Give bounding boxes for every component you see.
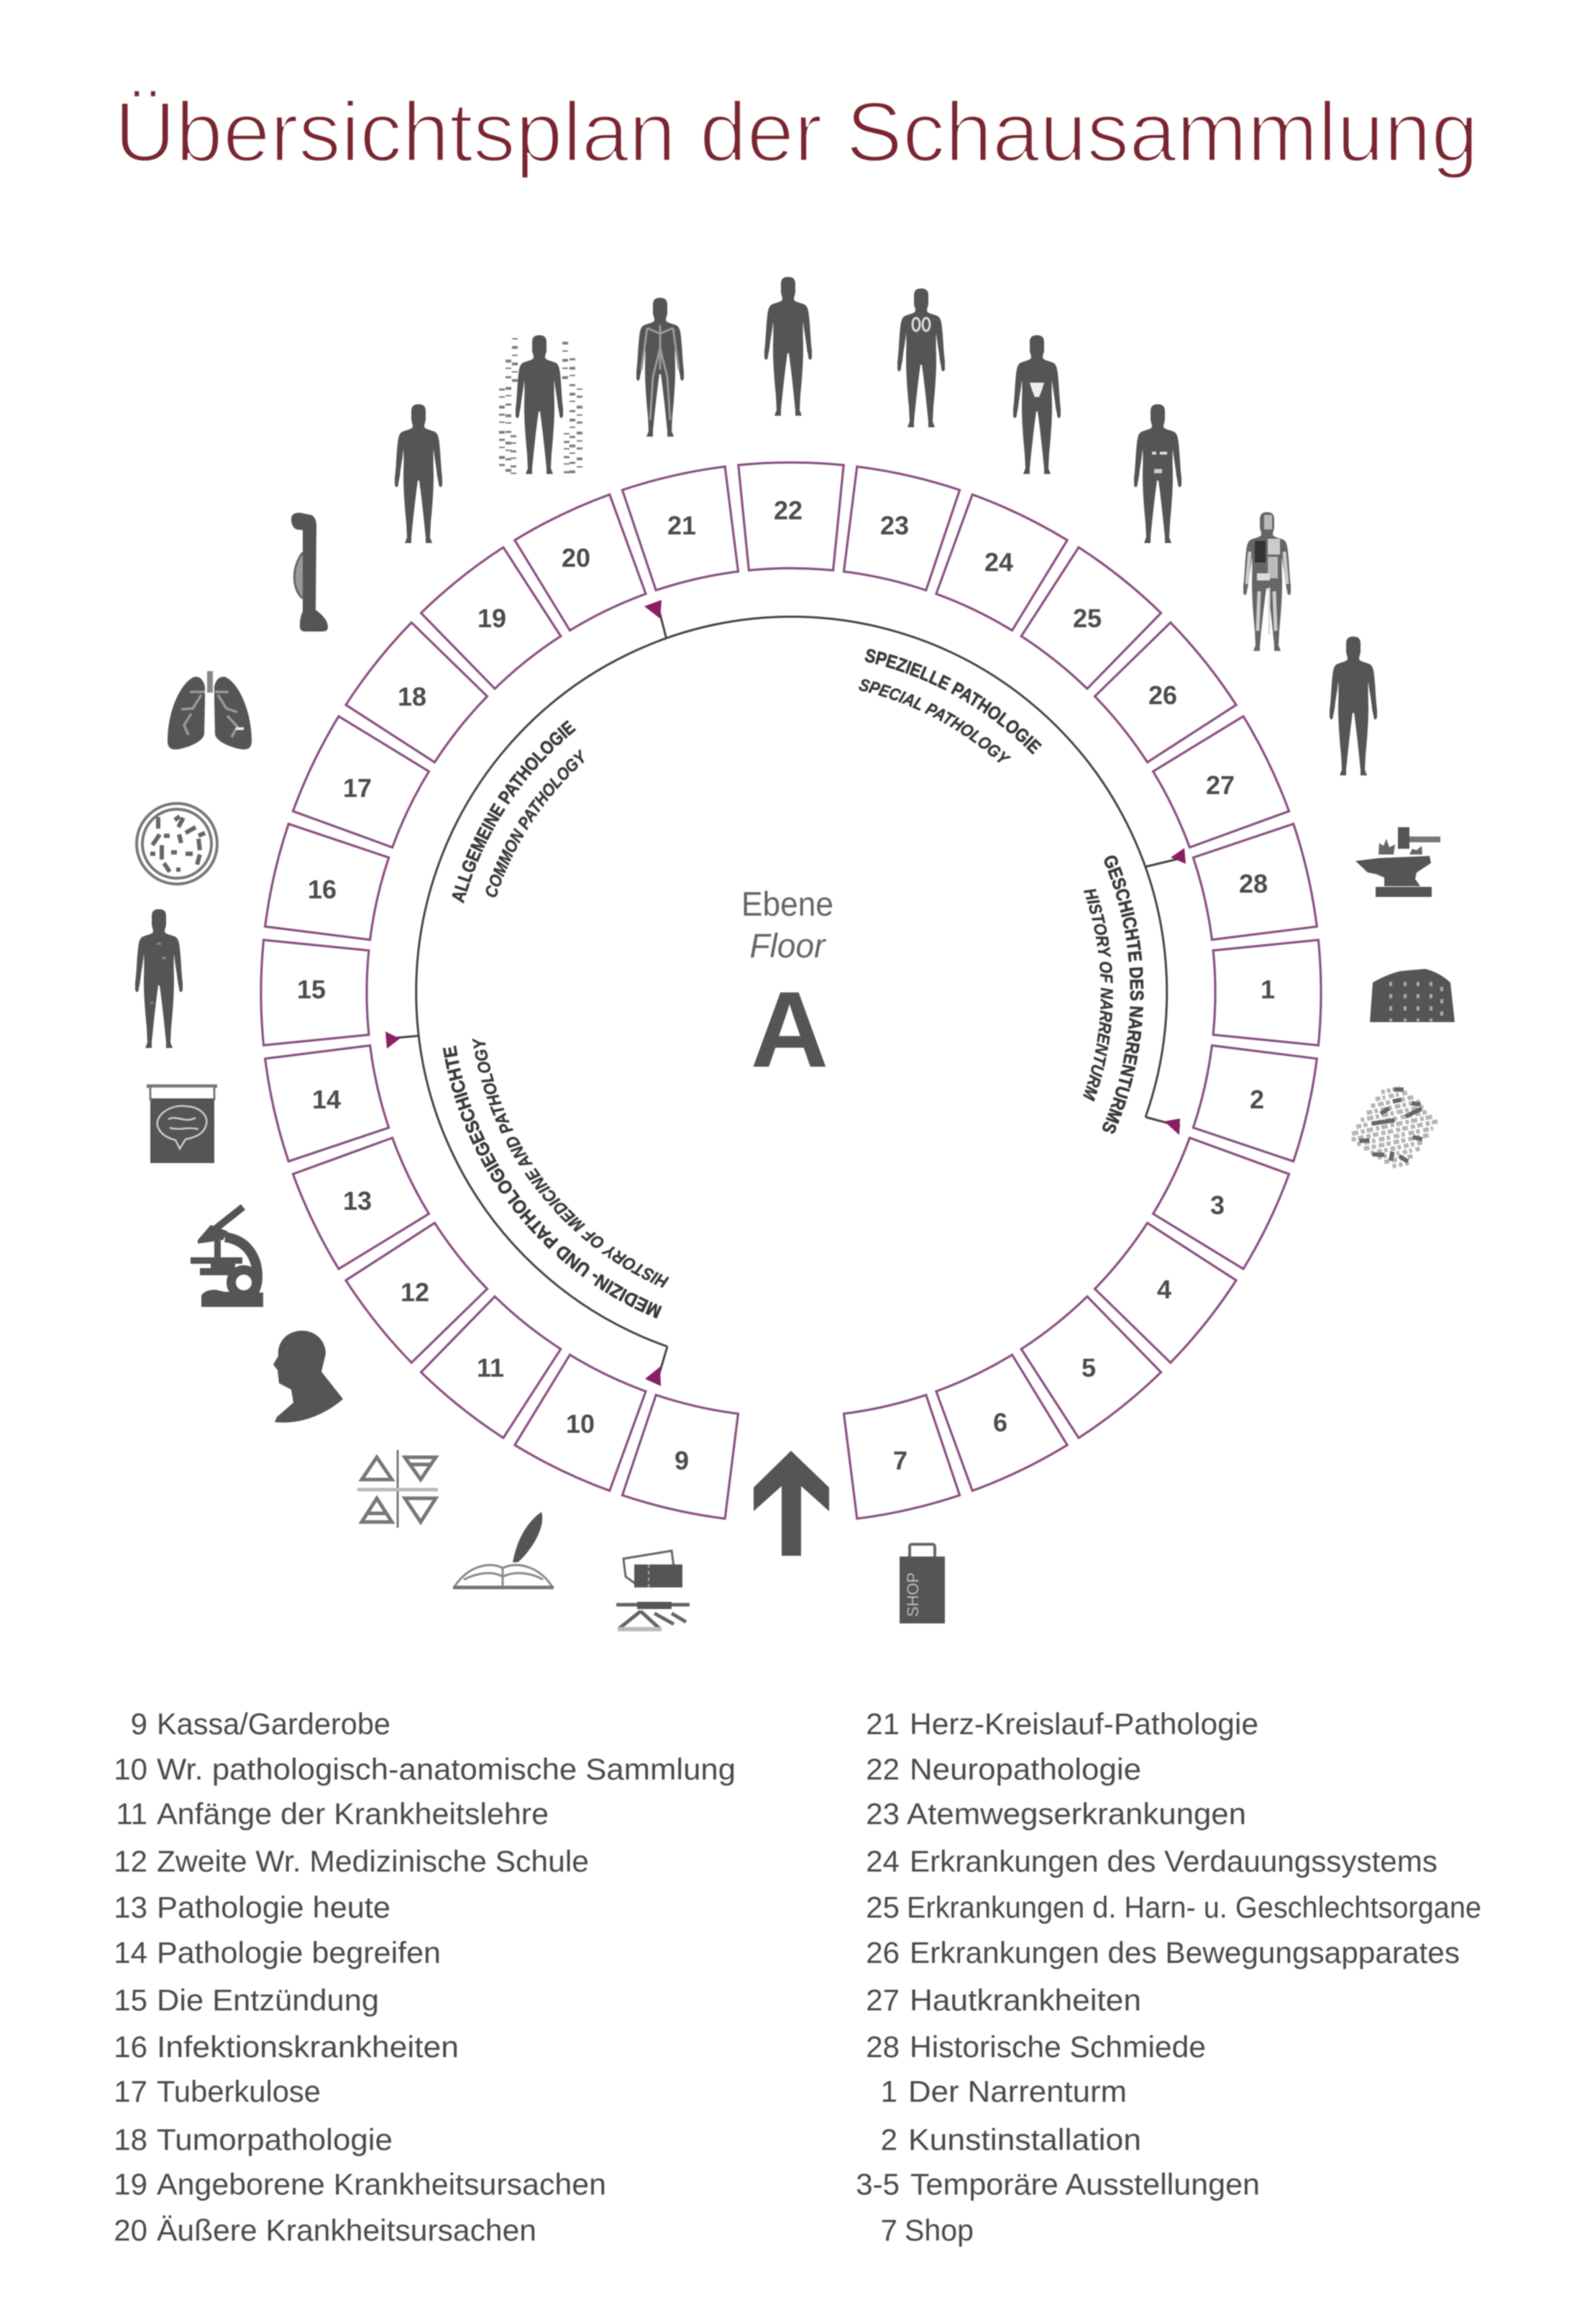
room 18 xyxy=(344,621,494,770)
panel: ring of numbered rooms xyxy=(261,462,1321,1521)
legend item 13: Pathologie heute xyxy=(157,1890,390,1924)
legend item 11: 11 xyxy=(116,1797,147,1831)
icon: anvil room 28 xyxy=(1355,827,1440,897)
legend item 17: Tuberkulose xyxy=(157,2074,321,2108)
legend item 25: Erkrankungen d. Harn- u. Geschlechtsorgane xyxy=(907,1890,1481,1924)
room 15 xyxy=(261,940,369,1045)
legend item 23: Atemwegserkrankungen xyxy=(907,1797,1246,1831)
room 22 xyxy=(739,462,843,570)
room 3 xyxy=(1148,1129,1291,1270)
legend item 13: 13 xyxy=(114,1890,147,1924)
legend item 3-5: 3-5 xyxy=(856,2167,900,2201)
icon: figure with particles room 20 xyxy=(502,335,580,475)
room 4 xyxy=(1088,1215,1238,1364)
room 10 xyxy=(513,1350,655,1493)
room 26: 26 xyxy=(1148,680,1177,710)
room 20 xyxy=(513,492,655,635)
icon: coat and hanger room 9 xyxy=(616,1551,690,1631)
room 2: 2 xyxy=(1250,1085,1264,1114)
icon: shop bag room 7: SHOP xyxy=(904,1572,922,1617)
room 11: 11 xyxy=(477,1353,504,1382)
section label: Spezielle Pathologie: SPEZIELLE PATHOLOGIE xyxy=(864,648,1043,755)
title: Übersichtsplan der Schausammlung xyxy=(114,85,1478,180)
legend item 24: Erkrankungen des Verdauungssystems xyxy=(910,1844,1437,1878)
icon: figure with circulatory system room 21 xyxy=(636,298,684,437)
room 26 xyxy=(1088,621,1238,770)
icon: figure room 19 xyxy=(395,404,442,543)
room 27 xyxy=(1148,715,1291,857)
room 14 xyxy=(262,1035,391,1162)
legend item 20: 20 xyxy=(114,2213,147,2247)
room 14: 14 xyxy=(312,1085,341,1114)
icon: lungs room 17 xyxy=(168,671,252,749)
room 25 xyxy=(1013,545,1163,696)
room 5: 5 xyxy=(1082,1353,1096,1382)
room 23: 23 xyxy=(880,511,909,540)
legend item 12: 12 xyxy=(114,1844,147,1878)
legend item 22: Neuropathologie xyxy=(910,1752,1141,1786)
icon: Narrenturm building room 1 xyxy=(1370,969,1455,1022)
icon: figure with brain room 22 xyxy=(764,277,812,416)
room 7 xyxy=(833,1393,960,1521)
legend item 17: 17 xyxy=(114,2074,147,2108)
room 21 xyxy=(622,464,749,593)
room 9 xyxy=(622,1393,749,1521)
legend item 21: 21 xyxy=(866,1707,900,1741)
inner section circle with section markers xyxy=(385,600,1186,1386)
room 28: 28 xyxy=(1239,869,1268,898)
section label: Medizin- und Pathologiegeschichte: MEDIZIN- UND PATHOLOGIEGESCHICHTE xyxy=(442,1044,663,1319)
icon: figure with urogenital organs room 25 xyxy=(1134,404,1181,543)
legend item 12: Zweite Wr. Medizinische Schule xyxy=(157,1844,589,1878)
legend item 24: 24 xyxy=(866,1844,900,1878)
room 25: 25 xyxy=(1073,603,1102,633)
legend item 2: Kunstinstallation xyxy=(908,2123,1141,2156)
room 16: 16 xyxy=(308,875,337,904)
room 12: 12 xyxy=(401,1277,429,1307)
legend item 28: Historische Schmiede xyxy=(910,2030,1206,2064)
icon: figure with lungs room 23 xyxy=(897,288,945,427)
legend left column xyxy=(114,1707,736,2247)
room 5 xyxy=(1013,1290,1163,1440)
icon: petri dish room 16 xyxy=(137,803,217,884)
room 24: 24 xyxy=(984,547,1013,577)
legend right column xyxy=(856,1707,1481,2247)
room 13 xyxy=(291,1129,434,1270)
section label: Geschichte des Narrenturms: GESCHICHTE DES NARRENTURMS xyxy=(1102,855,1145,1135)
room 22: 22 xyxy=(774,496,803,525)
room 1: 1 xyxy=(1261,975,1275,1004)
section label: Allgemeine Pathologie: COMMON PATHOLOGY xyxy=(485,748,585,898)
icon: brain in jar room 14 xyxy=(147,1086,217,1163)
centre floor label: Floor xyxy=(749,926,827,965)
legend item 20: Äußere Krankheitsursachen xyxy=(157,2213,536,2247)
legend item 25: 25 xyxy=(866,1890,900,1924)
icon: microscope room 13 xyxy=(191,1207,263,1307)
icon: four element symbols room 11 xyxy=(357,1450,438,1528)
room 28 xyxy=(1191,824,1320,950)
legend item 16: Infektionskrankheiten xyxy=(157,2030,459,2064)
room 18: 18 xyxy=(398,682,426,711)
legend item 14: Pathologie begreifen xyxy=(157,1936,441,1969)
legend item 11: Anfänge der Krankheitslehre xyxy=(157,1797,549,1831)
room 12 xyxy=(344,1215,494,1364)
icon: figure room 15 xyxy=(135,909,183,1048)
legend item 14: 14 xyxy=(114,1936,147,1969)
room 2 xyxy=(1191,1035,1320,1162)
legend item 16: 16 xyxy=(114,2030,147,2064)
room 6 xyxy=(927,1350,1069,1493)
legend item 9: Kassa/Garderobe xyxy=(157,1707,390,1741)
room 1 xyxy=(1213,940,1321,1045)
room 19 xyxy=(419,545,569,696)
legend item 1: 1 xyxy=(881,2074,897,2108)
room 3: 3 xyxy=(1210,1190,1225,1220)
room 24 xyxy=(927,492,1069,635)
icon: bust silhouette room 12 xyxy=(273,1331,343,1423)
legend item 7: Shop xyxy=(905,2213,974,2247)
room 17: 17 xyxy=(343,773,372,803)
legend item 19: Angeborene Krankheitsursachen xyxy=(157,2167,606,2201)
room 15: 15 xyxy=(297,975,326,1004)
icon: bone room 18 xyxy=(291,513,328,632)
legend item 10: Wr. pathologisch-anatomische Sammlung xyxy=(157,1752,736,1786)
room 6: 6 xyxy=(993,1408,1007,1437)
legend item 23: 23 xyxy=(866,1797,900,1831)
room 13: 13 xyxy=(343,1186,372,1216)
legend item 10: 10 xyxy=(114,1752,147,1786)
legend item 27: 27 xyxy=(866,1983,900,2017)
entrance arrow xyxy=(754,1451,829,1556)
room 19: 19 xyxy=(477,603,506,633)
room 16 xyxy=(262,824,391,950)
room 23 xyxy=(833,464,960,593)
room 10: 10 xyxy=(566,1409,595,1439)
legend item 1: Der Narrenturm xyxy=(908,2074,1127,2108)
centre floor label: A xyxy=(751,969,828,1090)
centre floor label: Ebene xyxy=(741,885,833,923)
legend item 27: Hautkrankheiten xyxy=(910,1983,1141,2017)
legend item 15: 15 xyxy=(114,1983,147,2017)
room 21: 21 xyxy=(667,511,696,540)
legend item 7: 7 xyxy=(881,2213,897,2247)
legend item 2: 2 xyxy=(881,2123,897,2156)
section label: Medizin- und Pathologiegeschichte: HISTORY OF MEDICINE AND PATHOLOGY xyxy=(472,1037,670,1289)
room 17 xyxy=(291,715,434,857)
room 11 xyxy=(419,1290,569,1440)
icon: figure with digestive system room 24 xyxy=(1013,335,1061,474)
legend item 15: Die Entzündung xyxy=(157,1983,379,2017)
room 27: 27 xyxy=(1206,770,1235,800)
icon: shop bag room 7 xyxy=(900,1544,945,1623)
icon: figure skin room 27 xyxy=(1330,637,1377,775)
centre floor label xyxy=(741,885,833,1090)
legend item 18: Tumorpathologie xyxy=(157,2123,393,2156)
legend item 9: 9 xyxy=(131,1707,147,1741)
room 4: 4 xyxy=(1157,1275,1171,1304)
room 9: 9 xyxy=(675,1446,689,1475)
icon: book and quill room 10 xyxy=(453,1512,554,1588)
section label: Geschichte des Narrenturms: HISTORY OF NARRENTURM xyxy=(1083,888,1114,1102)
legend item 28: 28 xyxy=(866,2030,900,2064)
section label: Spezielle Pathologie: SPECIAL PATHOLOGY xyxy=(858,678,1012,764)
icon: anatomical figure room 26 xyxy=(1243,512,1291,651)
section label: Allgemeine Pathologie: ALLGEMEINE PATHOLOGIE xyxy=(452,719,577,904)
legend item 26: 26 xyxy=(866,1936,900,1969)
legend item 3-5: Temporäre Ausstellungen xyxy=(910,2167,1260,2201)
legend item 22: 22 xyxy=(866,1752,900,1786)
legend item 19: 19 xyxy=(114,2167,147,2201)
room 20: 20 xyxy=(562,543,590,573)
legend item 21: Herz-Kreislauf-Pathologie xyxy=(910,1707,1258,1741)
icon: art installation room 2 xyxy=(1343,1082,1445,1173)
room 7: 7 xyxy=(893,1446,907,1475)
legend item 18: 18 xyxy=(114,2123,147,2156)
legend item 26: Erkrankungen des Bewegungsapparates xyxy=(910,1936,1460,1969)
